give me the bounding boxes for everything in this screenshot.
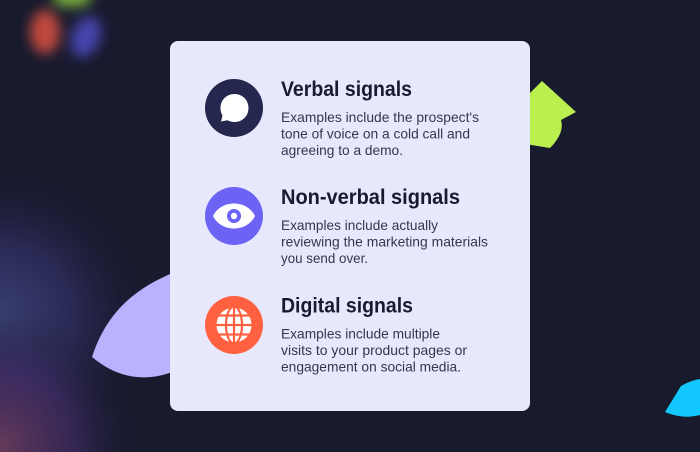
text: verbal description: agreeing to a demo. xyxy=(281,142,403,158)
text: digital description: Examples include multiple xyxy=(281,326,440,342)
text: digital description: engagement on social media. xyxy=(281,358,461,374)
signal: verbal xyxy=(205,78,479,158)
shape: green leaf xyxy=(525,81,576,148)
card panel xyxy=(170,41,530,411)
text: digital description: visits to your product pages or xyxy=(281,342,467,358)
text: verbal description: tone of voice on a cold call and xyxy=(281,126,470,142)
text: digital description xyxy=(281,326,467,374)
blurred blobs: top left xyxy=(30,0,107,62)
text: verbal description xyxy=(281,109,479,158)
shape: lilac leaf xyxy=(92,272,175,377)
shape: cyan leaf xyxy=(665,379,700,417)
icon: eye xyxy=(205,187,263,245)
icon: speech bubble xyxy=(205,79,263,137)
text: verbal description: Examples include the prospect's xyxy=(281,109,479,125)
text: non-verbal description: Examples include actually xyxy=(281,217,438,233)
text: non-verbal description: reviewing the marketing materials xyxy=(281,234,488,250)
blurred glow: left xyxy=(0,150,200,452)
heading: verbal signals: Verbal signals xyxy=(281,78,412,101)
signal: digital xyxy=(205,294,467,374)
heading: non-verbal signals: Non-verbal signals xyxy=(281,186,460,209)
signal: non-verbal xyxy=(205,186,488,266)
heading: digital signals: Digital signals xyxy=(281,294,413,318)
text: non-verbal description: you send over. xyxy=(281,250,368,266)
icon: globe xyxy=(205,296,263,354)
text: non-verbal description xyxy=(281,217,488,266)
